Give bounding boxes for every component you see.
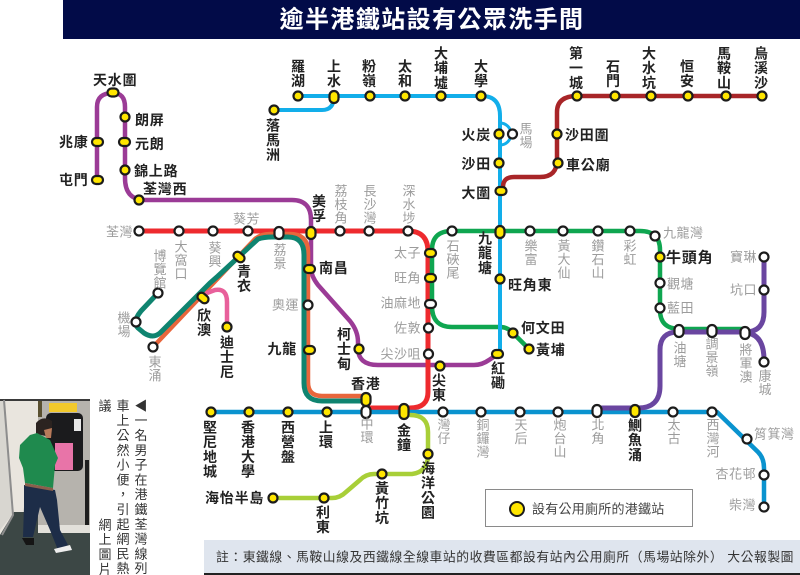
station: 欣澳 — [196, 291, 212, 338]
station: 黃竹坑: 黃竹坑 — [374, 481, 390, 526]
station: 太和: 太和 — [397, 59, 413, 89]
station: 馬場 — [508, 122, 532, 149]
station: 烏溪沙: 烏溪沙 — [753, 46, 769, 90]
station: 恒安: 恒安 — [679, 59, 695, 89]
station: 彩虹: 彩虹 — [622, 239, 636, 266]
station: 旺角 — [394, 270, 436, 286]
station: 上環: 上環 — [318, 420, 334, 450]
station: 坑口: 坑口 — [730, 282, 757, 298]
legend text: 設有公用廁所的港鐵站 — [532, 502, 665, 516]
station: 奧運: 奧運 — [272, 298, 299, 312]
station: 香港大學: 香港大學 — [240, 419, 256, 479]
station: 杏花邨: 杏花邨 — [715, 466, 756, 482]
station: 北角: 北角 — [590, 418, 604, 445]
station: 九龍塘 — [477, 226, 504, 275]
station: 西營盤: 西營盤 — [280, 420, 296, 464]
station: 西灣河: 西灣河 — [704, 418, 720, 458]
station: 康城 — [756, 358, 772, 397]
station: 香港: 香港 — [351, 376, 381, 392]
station: 藍田: 藍田 — [667, 300, 694, 316]
line: Tung Chung — [153, 234, 362, 396]
station: 紅磡: 紅磡 — [490, 360, 506, 391]
station: 馬鞍山: 馬鞍山 — [716, 46, 732, 91]
station: 機場: 機場 — [116, 311, 130, 338]
station: 大學: 大學 — [473, 58, 489, 89]
photo caption column 3: 議 — [96, 399, 112, 414]
station: 太古: 太古 — [666, 418, 680, 445]
station: 調景嶺: 調景嶺 — [704, 337, 718, 378]
station: 荃灣西 — [134, 181, 187, 204]
station: 荔枝角: 荔枝角 — [332, 184, 348, 224]
station: 天水圍: 天水圍 — [93, 72, 137, 88]
stations: Ma On Shan — [552, 45, 769, 173]
station: 黃大仙: 黃大仙 — [556, 239, 570, 280]
station: 大水坑: 大水坑 — [641, 45, 657, 91]
station: 大埔墟: 大埔墟 — [433, 45, 449, 91]
station: 太子: 太子 — [394, 246, 421, 260]
station: 石硤尾: 石硤尾 — [444, 239, 460, 280]
station: 青衣 — [232, 250, 252, 294]
station: 欣澳: 欣澳 — [196, 307, 212, 338]
station: 樂富: 樂富 — [522, 238, 538, 267]
legend box — [486, 490, 692, 526]
station: 九龍 — [267, 341, 315, 357]
station: 上環 — [318, 408, 334, 450]
line: Kwun Tong — [432, 231, 745, 349]
station: 九龍: 九龍 — [267, 341, 297, 357]
station: 利東: 利東 — [315, 505, 331, 535]
station: 東涌 — [146, 342, 162, 382]
station: 柯士甸 — [336, 326, 364, 372]
station: 黃埔: 黃埔 — [536, 342, 566, 358]
station: 天后: 天后 — [512, 418, 528, 445]
station: 屯門: 屯門 — [59, 172, 89, 188]
legend icon: yellow station — [510, 502, 524, 516]
line: East Rail — [274, 96, 500, 352]
station: 屯門 — [59, 172, 103, 188]
line: Tuen Ma west — [97, 93, 498, 365]
station: 牛頭角: 牛頭角 — [666, 248, 713, 266]
station: 南昌: 南昌 — [319, 260, 349, 276]
station: 元朗 — [119, 136, 165, 152]
station: 筲箕灣: 筲箕灣 — [754, 426, 795, 442]
station: 觀塘: 觀塘 — [667, 276, 694, 292]
station: 美孚 — [306, 193, 327, 239]
station: 康城: 康城 — [756, 368, 772, 397]
line: Tseung Kwan O — [597, 257, 764, 408]
stations: Tseung Kwan O line — [672, 250, 772, 397]
line: Island — [211, 412, 764, 507]
station: 旺角東 — [496, 274, 552, 293]
station: 羅湖: 羅湖 — [290, 59, 306, 89]
station: 天水圍 — [93, 72, 137, 96]
station: 旺角東: 旺角東 — [508, 277, 552, 293]
station: 兆康: 兆康 — [59, 134, 89, 150]
line: Racecourse loop — [500, 123, 511, 145]
rail network lines — [97, 93, 764, 507]
station: 海怡半島: 海怡半島 — [205, 490, 264, 506]
station: 深水埗: 深水埗 — [400, 184, 416, 224]
photo caption column 2: 車上公然小便，引起網民熱 — [114, 399, 130, 575]
station: 火炭: 火炭 — [461, 127, 491, 143]
station: 柯士甸: 柯士甸 — [336, 326, 352, 372]
stations: West Rail — [59, 72, 506, 403]
station: 何文田: 何文田 — [521, 320, 565, 336]
station: 油塘: 油塘 — [672, 341, 686, 369]
station: 佐敦 — [394, 320, 433, 336]
station: 兆康 — [59, 134, 103, 150]
station: 香港 — [351, 376, 381, 406]
stations: Tung Chung and Airport — [116, 249, 381, 406]
station: 石門: 石門 — [605, 59, 621, 89]
station: 第一城: 第一城 — [568, 45, 584, 91]
station: 葵芳: 葵芳 — [233, 212, 260, 226]
station: 沙田: 沙田 — [461, 156, 491, 172]
footnote text: 註：東鐵線、馬鞍山線及西鐵線全線車站的收費區都設有站內公用廁所（馬場站除外） 大公報製圖 — [216, 550, 794, 564]
stations: East Rail — [265, 45, 552, 293]
station: 上水: 上水 — [326, 59, 342, 89]
station: 馬場: 馬場 — [518, 122, 532, 149]
station: 博覽館: 博覽館 — [152, 249, 166, 290]
stations: Kwun Tong line — [444, 226, 713, 358]
station: 朗屏: 朗屏 — [135, 112, 165, 128]
station: 佐敦: 佐敦 — [394, 320, 421, 336]
station: 東涌: 東涌 — [146, 354, 162, 382]
station: 迪士尼: 迪士尼 — [219, 334, 235, 379]
station: 樂富 — [522, 226, 538, 267]
station: 朗屏 — [120, 112, 165, 128]
station: 葵芳 — [233, 212, 260, 236]
station: 車公廟: 車公廟 — [566, 157, 610, 173]
photo caption column 1: ◀一名男子在港鐵荃灣線列 — [132, 399, 148, 575]
station: 九龍灣: 九龍灣 — [663, 226, 704, 240]
station: 將軍澳: 將軍澳 — [738, 343, 752, 384]
station: 鰂魚涌: 鰂魚涌 — [627, 417, 643, 463]
station: 大窩口: 大窩口 — [172, 240, 188, 280]
station: 荃灣: 荃灣 — [106, 224, 133, 240]
stations: South Island line — [205, 450, 436, 535]
station: 灣仔: 灣仔 — [436, 418, 450, 446]
station: 筲箕灣 — [742, 426, 795, 444]
title banner — [63, 0, 800, 39]
station: 北角 — [590, 405, 604, 445]
station: 葵興 — [206, 226, 222, 268]
station: 上水 — [326, 59, 342, 103]
station: 南昌 — [304, 260, 349, 276]
station: 寶琳: 寶琳 — [730, 250, 757, 264]
station: 彩虹 — [622, 226, 636, 266]
station: 金鐘 — [396, 404, 412, 453]
station: 荃灣西: 荃灣西 — [143, 181, 187, 197]
station: 大圍: 大圍 — [461, 185, 491, 201]
man figure — [19, 418, 72, 553]
station: 荔景 — [272, 227, 286, 270]
stations: Tsuen Wan line — [106, 184, 436, 362]
station: 機場 — [116, 311, 140, 338]
station: 落馬洲: 落馬洲 — [265, 118, 281, 162]
station: 油麻地: 油麻地 — [380, 296, 421, 310]
station: 旺角: 旺角 — [394, 270, 421, 286]
line: Disneyland Resort — [207, 290, 227, 327]
station: 堅尼地城: 堅尼地城 — [202, 420, 218, 480]
line: South Island — [273, 415, 428, 498]
station: 大圍 — [461, 185, 506, 201]
photo: man at train door — [0, 399, 90, 575]
station: 油塘 — [672, 325, 686, 369]
station: 金鐘: 金鐘 — [396, 422, 412, 453]
station: 粉嶺: 粉嶺 — [361, 58, 377, 89]
station: 青衣: 青衣 — [236, 263, 252, 294]
line: Ma On Shan — [503, 96, 762, 190]
line: Airport Express — [136, 237, 364, 401]
station: 尖沙咀: 尖沙咀 — [380, 346, 421, 362]
title banner: 逾半港鐵站設有公眾洗手間 — [280, 6, 584, 34]
station: 長沙灣: 長沙灣 — [362, 184, 376, 225]
station: 柴灣: 柴灣 — [729, 498, 756, 512]
station: 美孚: 美孚 — [311, 193, 327, 224]
station: 元朗: 元朗 — [135, 136, 165, 152]
station: 葵興: 葵興 — [206, 241, 222, 268]
station: 中環: 中環 — [358, 417, 374, 444]
station: 柴灣 — [729, 498, 768, 512]
station: 炮台山: 炮台山 — [552, 418, 566, 458]
station: 鑽石山: 鑽石山 — [590, 238, 604, 280]
footnote bar — [204, 540, 800, 575]
station: 太子 — [394, 246, 436, 260]
station: 九龍塘: 九龍塘 — [477, 231, 493, 275]
station: 奧運 — [272, 298, 312, 312]
station: 銅鑼灣: 銅鑼灣 — [474, 418, 490, 459]
line: Tsuen Wan — [139, 231, 428, 408]
station: 尖東: 尖東 — [431, 372, 447, 403]
station: 荔景: 荔景 — [272, 243, 286, 270]
stations: Island line — [202, 404, 795, 512]
station: 海洋公園: 海洋公園 — [420, 460, 436, 521]
station: 錦上路: 錦上路 — [134, 163, 178, 179]
station: 沙田圍: 沙田圍 — [565, 127, 609, 143]
